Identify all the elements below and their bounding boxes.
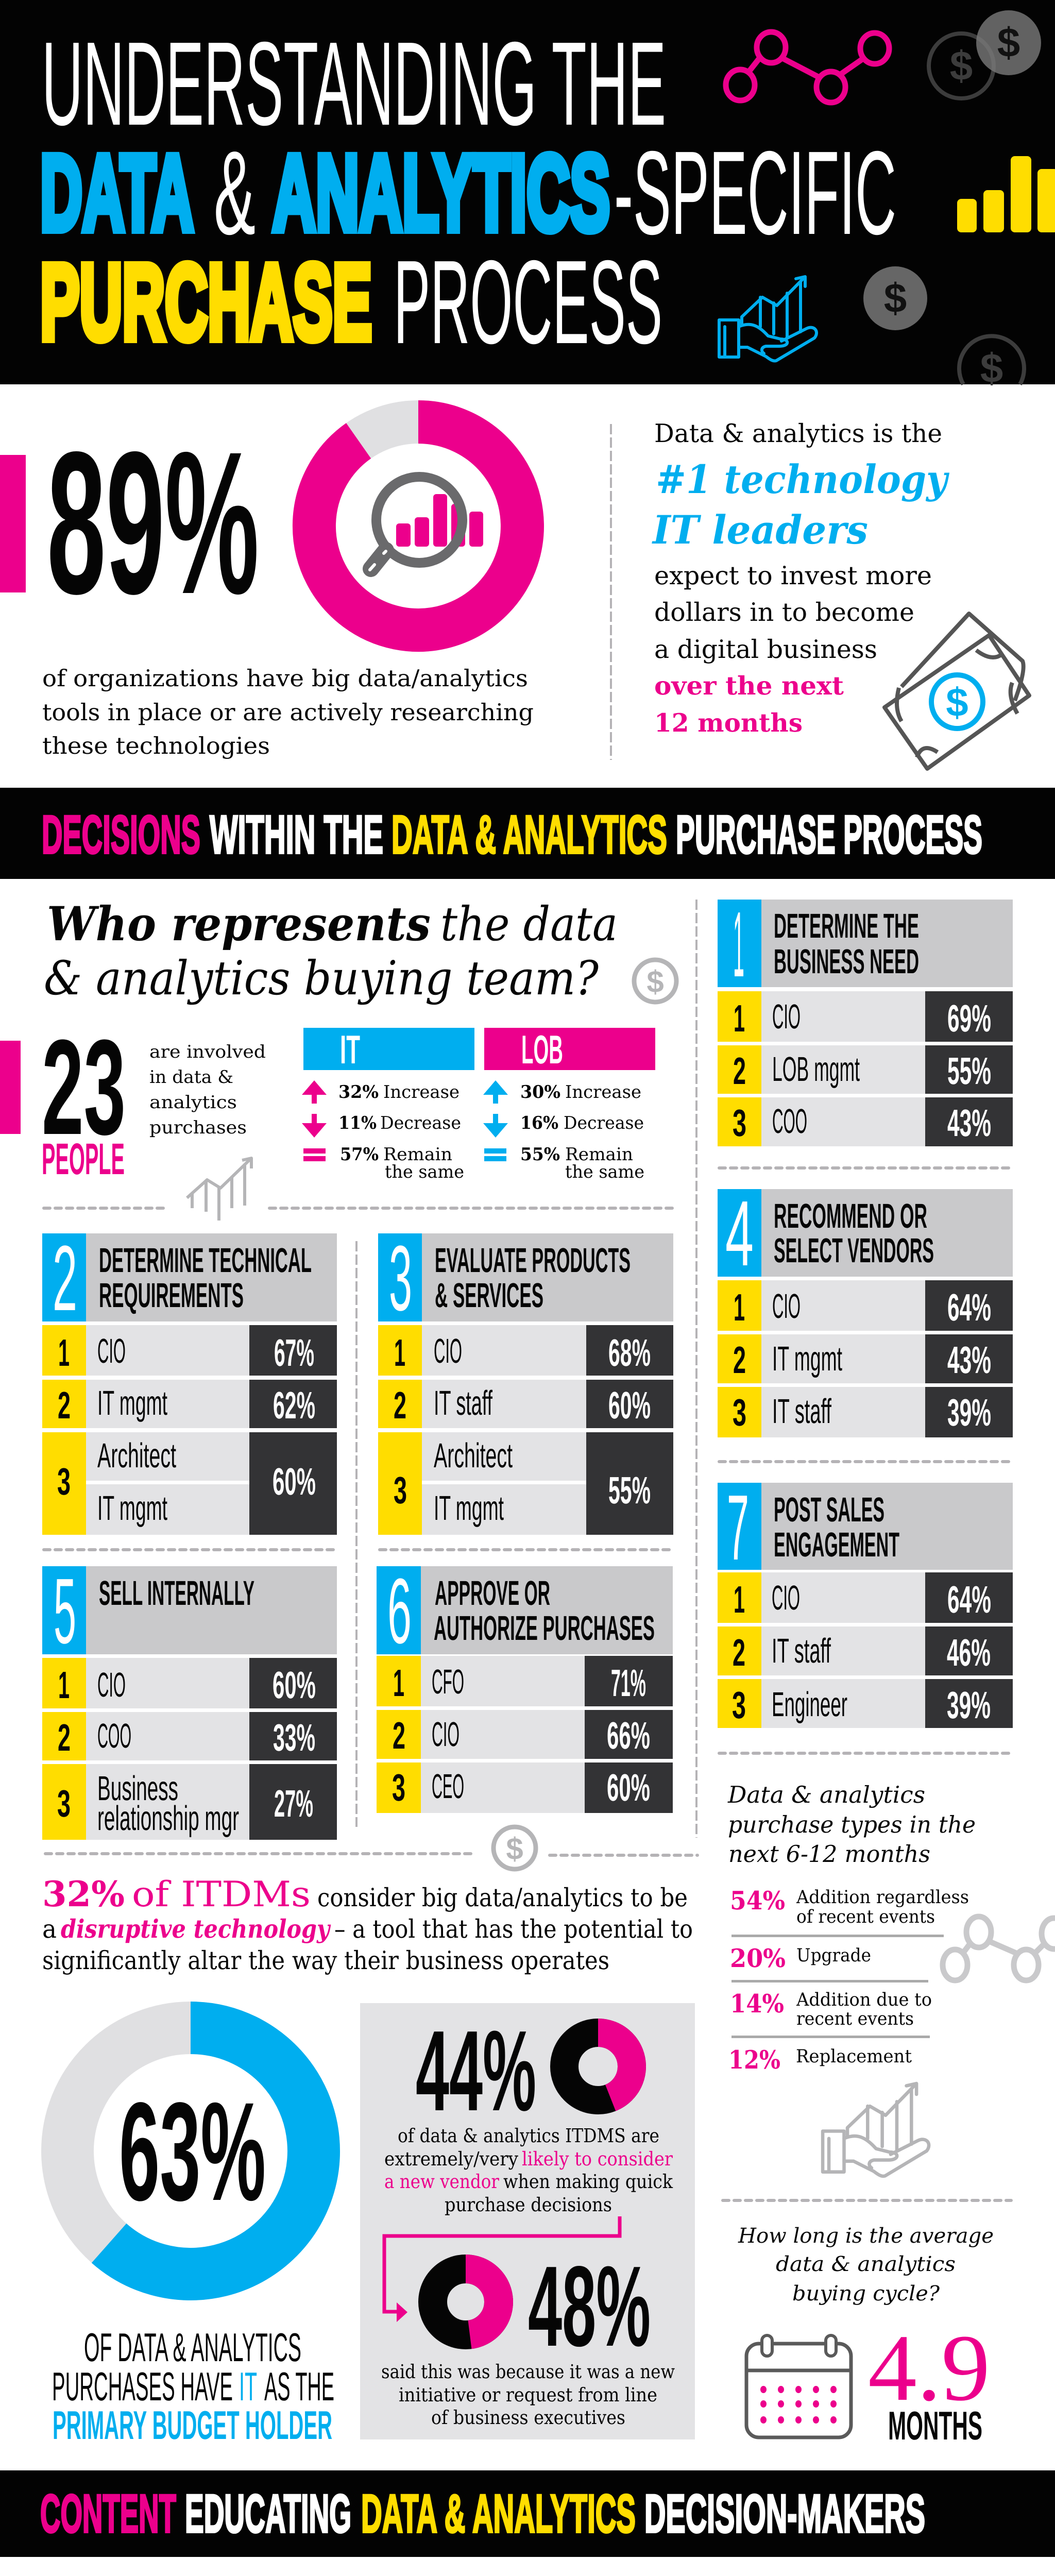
LOB column: 16% <box>520 1113 558 1133</box>
row: CIO 64%: 64% <box>947 1578 991 1621</box>
IT column: 57% <box>340 1144 379 1165</box>
text: organizations: these technologies <box>42 732 270 759</box>
stat: 12% <box>728 2045 912 2075</box>
big number 48%: 48% <box>528 2243 651 2370</box>
icon: gray hand holding chart <box>823 2083 929 2176</box>
text: AS THE <box>264 2364 334 2409</box>
text: number 1 technology: 12 months <box>654 708 803 738</box>
text: 32 percent of ITDMs: consider big data/analytics to be <box>317 1883 688 1912</box>
row: Architect / IT mgmt 55%: IT mgmt <box>434 1489 504 1528</box>
card 1: determine the business need: BUSINESS NEED <box>774 942 919 981</box>
card 7: post sales engagement: POST SALES <box>774 1490 884 1529</box>
LOB column: the same <box>565 1162 644 1182</box>
IT column: the same <box>385 1162 464 1182</box>
text: new initiative: initiative or request from line <box>399 2384 657 2406</box>
row: Engineer 39%: Engineer <box>772 1685 847 1724</box>
text: number 1 technology: IT leaders <box>652 507 868 553</box>
big number 63%: 63% <box>119 2073 266 2230</box>
row: CIO 69%: 1 <box>734 997 745 1040</box>
card 5: sell internally: 5 <box>54 1560 76 1663</box>
row: CIO 60%: CIO <box>97 1666 126 1704</box>
icon: magnifier with bars <box>370 477 483 570</box>
big number 89%: 89% <box>47 410 259 636</box>
text: likely to consider a new vendor: likely to consider <box>522 2148 673 2170</box>
card 2: determine technical requirements: 2 <box>53 1227 77 1330</box>
row: CIO 67%: 67% <box>274 1331 314 1374</box>
row: LOB mgmt 55%: LOB mgmt <box>772 1050 860 1089</box>
IT column: IT <box>340 1027 360 1072</box>
big number 44%: 44% <box>416 2007 536 2135</box>
row: Business relationship mgr 27%: 3 <box>57 1782 71 1825</box>
text: are involved: purchases <box>149 1117 247 1138</box>
stat: 12%: 12% <box>728 2045 780 2075</box>
row: IT mgmt 43%: 43% <box>947 1338 991 1381</box>
icon: gray coin <box>634 960 676 1002</box>
card 6: approve or authorize purchases: 6 <box>387 1560 412 1663</box>
text: organizations: of organizations have big data/analytics <box>42 665 528 692</box>
card 6: approve or authorize purchases: APPROVE OR <box>435 1574 550 1613</box>
card 2: determine technical requirements <box>42 1227 337 1535</box>
LOB column: Increase <box>565 1082 641 1103</box>
section heading: EDUCATING <box>185 2484 351 2544</box>
section heading: CONTENT <box>40 2484 176 2544</box>
title <box>40 17 896 368</box>
row: CIO 66%: CIO <box>432 1715 460 1754</box>
row: COO 43% <box>718 1097 1013 1146</box>
icon: dollar coin outline <box>929 33 994 98</box>
card 2: determine technical requirements: DETERMINE TECHNICAL <box>99 1241 312 1280</box>
row: CIO 69%: 69% <box>947 997 991 1040</box>
text: are involved: are involved <box>149 1042 266 1062</box>
card 5: sell internally: SELL INTERNALLY <box>99 1574 254 1613</box>
row: IT mgmt 43%: IT mgmt <box>772 1340 842 1378</box>
row: CIO 66%: 66% <box>607 1714 650 1757</box>
icon: calendar <box>746 2335 851 2437</box>
text: are involved <box>149 1042 266 1138</box>
card 3: evaluate products and services: EVALUATE PRODUCTS <box>435 1241 631 1280</box>
icon: dollar coin filled lower: $ <box>884 275 907 321</box>
row: IT staff 60%: 2 <box>394 1384 406 1427</box>
LOB column: 30% <box>520 1082 560 1103</box>
row: Engineer 39%: 39% <box>947 1684 991 1726</box>
card 7: post sales engagement: ENGAGEMENT <box>774 1526 899 1564</box>
panel: header <box>0 0 1055 391</box>
row: CFO 71%: CFO <box>432 1663 464 1701</box>
question: buying cycle? <box>792 2282 940 2306</box>
icon: dollar coin outline lower: $ <box>980 345 1003 391</box>
IT column: 32% <box>338 1082 379 1103</box>
stat: 12%: Replacement <box>796 2046 912 2067</box>
section heading: DATA & ANALYTICS <box>392 805 667 865</box>
IT column <box>302 1027 474 1182</box>
row: CIO 67%: 1 <box>58 1331 70 1374</box>
text: 32 percent of ITDMs: – a tool that has the potential to <box>334 1914 693 1944</box>
text: new initiative: of business executives <box>431 2406 625 2429</box>
stat: 23 people <box>42 1011 126 1184</box>
row: COO 43%: 3 <box>733 1101 746 1144</box>
icon: network line <box>726 32 889 103</box>
row: LOB mgmt 55%: 2 <box>733 1049 746 1092</box>
row: CFO 71%: 71% <box>611 1662 646 1704</box>
text: number 1 technology: over the next <box>654 671 844 701</box>
card 4: recommend or select vendors <box>718 1182 1013 1437</box>
IT column: 11% <box>338 1113 377 1133</box>
text: 32 percent of ITDMs: disruptive technology <box>61 1914 331 1944</box>
stat: 14%: Addition due to <box>796 1990 932 2010</box>
text: number 1 technology <box>652 419 949 738</box>
text: PEOPLE <box>42 1134 125 1184</box>
row: COO 43%: 43% <box>947 1101 991 1144</box>
panel: section banner content <box>0 2470 1055 2557</box>
heading: Data & analytics <box>727 1781 925 1808</box>
row: IT staff 46%: 2 <box>733 1631 745 1674</box>
icon: gray coin: $ <box>506 1832 523 1866</box>
row: Architect / IT mgmt 55%: 3 <box>394 1469 407 1512</box>
text: organizations: tools in place or are actively researching <box>42 699 534 726</box>
row: IT staff 39%: 39% <box>947 1391 991 1434</box>
row: Business relationship mgr 27%: relationship mgr <box>97 1799 239 1838</box>
card 3: evaluate products and services: 3 <box>389 1227 412 1330</box>
LOB column: Remain <box>565 1144 633 1165</box>
text: primary budget holder: PURCHASES HAVE <box>52 2364 233 2409</box>
row: CIO 64% <box>718 1572 1013 1623</box>
text: number 1 technology: a digital business <box>654 635 877 664</box>
icon: gray network <box>943 1917 1055 1980</box>
row: IT mgmt 62% <box>42 1380 337 1428</box>
row: CIO 60%: 1 <box>58 1664 70 1706</box>
row: Architect / IT mgmt 60% <box>42 1432 337 1535</box>
row: IT staff 60%: IT staff <box>434 1384 492 1422</box>
icon: money bills <box>884 614 1029 769</box>
stat: 20%: 20% <box>730 1943 786 1973</box>
text: likely to consider a new vendor: extremely/very <box>384 2148 518 2170</box>
card 7: post sales engagement: 7 <box>727 1476 749 1580</box>
row: Architect / IT mgmt 55%: 55% <box>608 1469 651 1512</box>
card 3: evaluate products and services: & SERVICES <box>435 1276 543 1315</box>
row: CIO 64% <box>718 1280 1013 1331</box>
heading: who represents: & analytics buying team? <box>44 952 599 1006</box>
row: CIO 64%: CIO <box>772 1287 801 1326</box>
icon: dollar coin outline: $ <box>950 43 973 89</box>
row: CIO 68%: CIO <box>434 1332 462 1370</box>
panel: 89 percent stat <box>0 410 1029 769</box>
row: CEO 60%: CEO <box>432 1767 464 1806</box>
icon: money bills: $ <box>946 680 968 725</box>
arrow: connector <box>384 2216 620 2322</box>
LOB column: Decrease <box>564 1113 644 1133</box>
row: IT staff 46%: 46% <box>947 1631 991 1674</box>
text: 32 percent of ITDMs: of ITDMs <box>132 1874 311 1915</box>
text: new initiative <box>381 2361 675 2429</box>
donut chart 63% <box>67 2028 314 2274</box>
section heading <box>42 805 982 865</box>
icon: gray chart <box>187 1158 251 1221</box>
section heading: DATA & ANALYTICS <box>361 2484 636 2544</box>
text: are involved: analytics <box>149 1092 237 1113</box>
row: Architect / IT mgmt 60%: Architect <box>97 1436 176 1475</box>
stat: 54%: of recent events <box>796 1907 935 1927</box>
icon: dollar coin outline lower <box>959 336 1024 391</box>
row: CIO 68%: 1 <box>394 1331 405 1374</box>
stat: 4.9 months: 4.9 <box>868 2315 990 2421</box>
row: IT staff 39%: IT staff <box>772 1392 831 1431</box>
row: IT mgmt 43%: 2 <box>733 1338 746 1381</box>
row: Engineer 39%: 3 <box>732 1684 746 1726</box>
question: data & analytics <box>776 2252 956 2276</box>
LOB column: 55% <box>520 1144 560 1165</box>
icon: dollar coin filled lower <box>863 266 927 330</box>
row: CIO 64%: CIO <box>772 1579 800 1617</box>
row: IT staff 39%: 3 <box>733 1391 746 1434</box>
text: 32 percent of ITDMs: 32% <box>42 1874 125 1915</box>
row: COO 43%: COO <box>772 1102 807 1141</box>
row: Business relationship mgr 27%: 27% <box>274 1782 313 1825</box>
stat: 23 people: 23 <box>42 1011 126 1163</box>
row: IT staff 39% <box>718 1387 1013 1437</box>
row: CIO 64%: 1 <box>734 1286 745 1329</box>
donut chart 44% <box>565 2033 632 2100</box>
title: DATA <box>40 133 194 253</box>
text: likely to consider a new vendor: a new vendor <box>384 2171 499 2193</box>
row: IT staff 46%: IT staff <box>772 1632 831 1670</box>
heading: purchase types in the <box>728 1811 976 1838</box>
text: number 1 technology: expect to invest more <box>654 561 932 590</box>
row: IT mgmt 62%: 62% <box>273 1384 315 1427</box>
text: 32 percent of ITDMs: a <box>42 1914 57 1944</box>
row: LOB mgmt 55% <box>718 1045 1013 1094</box>
heading: who represents: Who represents <box>47 897 431 952</box>
IT column: Remain <box>383 1144 452 1165</box>
card 1: determine the business need: DETERMINE THE <box>774 907 919 945</box>
question: How long is the average <box>738 2224 994 2248</box>
row: COO 33%: 33% <box>273 1716 315 1759</box>
card 1: determine the business need <box>718 893 1013 1146</box>
row: Business relationship mgr 27% <box>42 1764 337 1840</box>
accent bar <box>0 455 26 592</box>
text: likely to consider a new vendor <box>384 2125 673 2216</box>
text: likely to consider a new vendor: of data & analytics ITDMS are <box>398 2125 659 2147</box>
card 6: approve or authorize purchases: AUTHORIZE PURCHASES <box>434 1609 655 1648</box>
text: number 1 technology: dollars in to become <box>654 598 914 627</box>
row: CEO 60%: 3 <box>392 1766 405 1809</box>
question <box>738 2224 994 2306</box>
text: number 1 technology: Data & analytics is the <box>654 419 942 448</box>
icon: dollar coin filled <box>976 10 1041 75</box>
row: CIO 68% <box>378 1325 673 1376</box>
row: Architect / IT mgmt 60%: 3 <box>57 1460 71 1503</box>
row: Architect / IT mgmt 55% <box>378 1432 673 1535</box>
card 2: determine technical requirements: REQUIREMENTS <box>99 1276 244 1315</box>
row: CIO 64%: 64% <box>947 1286 991 1329</box>
row: CFO 71% <box>377 1656 673 1706</box>
row: Business relationship mgr 27%: Business <box>97 1769 178 1808</box>
stat: 14%: 14% <box>730 1989 784 2019</box>
stat: 54%: 54% <box>730 1886 785 1916</box>
row: COO 33%: 2 <box>58 1716 71 1759</box>
row: CIO 64%: 1 <box>734 1578 745 1621</box>
card 1: determine the business need: 1 <box>733 893 744 996</box>
row: IT mgmt 62%: IT mgmt <box>97 1384 167 1422</box>
donut chart 89% <box>314 422 522 630</box>
heading <box>727 1781 976 1868</box>
row: CIO 60% <box>42 1658 337 1708</box>
card 5: sell internally <box>42 1560 337 1840</box>
title: ANALYTICS <box>273 133 610 253</box>
text: 32 percent of ITDMs <box>42 1874 693 1975</box>
row: CIO 60%: 60% <box>273 1664 316 1706</box>
row: IT staff 60%: 60% <box>608 1384 651 1427</box>
IT column: Decrease <box>380 1113 461 1133</box>
stat: 14%: recent events <box>796 2009 914 2029</box>
row: CIO 66%: 2 <box>393 1714 405 1757</box>
row: LOB mgmt 55%: 55% <box>947 1049 991 1092</box>
row: CIO 69% <box>718 991 1013 1042</box>
title: & <box>214 126 256 259</box>
row: IT mgmt 43% <box>718 1334 1013 1383</box>
text: primary budget holder <box>52 2325 334 2448</box>
row: IT staff 46% <box>718 1626 1013 1675</box>
text: primary budget holder: PRIMARY BUDGET HOLDER <box>53 2402 332 2448</box>
panel: new vendor stats <box>360 2003 695 2439</box>
text: likely to consider a new vendor: when making quick <box>503 2171 673 2193</box>
row: CEO 60%: 60% <box>607 1766 650 1809</box>
row: Engineer 39% <box>718 1679 1013 1728</box>
heading: who represents <box>44 897 618 1006</box>
card 6: approve or authorize purchases <box>377 1560 673 1813</box>
row: IT mgmt 62%: 2 <box>58 1384 71 1427</box>
section heading: DECISIONS <box>42 805 200 865</box>
section heading <box>40 2484 925 2544</box>
stat: 54% <box>730 1886 969 1927</box>
row: Architect / IT mgmt 55%: Architect <box>434 1436 513 1475</box>
row: IT staff 60% <box>378 1380 673 1428</box>
LOB column: LOB <box>521 1027 563 1072</box>
row: CFO 71%: 1 <box>393 1662 404 1704</box>
text: new initiative: said this was because it was a new <box>381 2361 675 2383</box>
row: CIO 67% <box>42 1325 337 1376</box>
row: COO 33%: COO <box>97 1717 131 1755</box>
panel: section banner decisions <box>0 788 1055 879</box>
title: PROCESS <box>394 235 662 368</box>
card 7: post sales engagement <box>718 1476 1013 1728</box>
card 4: recommend or select vendors: 4 <box>725 1182 754 1285</box>
row: Architect / IT mgmt 60%: IT mgmt <box>97 1489 167 1528</box>
icon: gray coin <box>494 1827 536 1869</box>
icon: gray coin: $ <box>646 964 664 999</box>
row: CEO 60% <box>377 1762 673 1813</box>
text: primary budget holder: IT <box>239 2364 257 2409</box>
stat: 14% <box>730 1989 932 2029</box>
row: COO 33% <box>42 1712 337 1760</box>
row: CIO 69%: CIO <box>772 997 801 1036</box>
title: PURCHASE <box>40 243 372 362</box>
text: 32 percent of ITDMs: significantly altar the way their business operates <box>42 1946 609 1975</box>
icon: yellow bars <box>957 156 1055 232</box>
row: Architect / IT mgmt 60%: 60% <box>273 1460 316 1503</box>
panel: purchase types <box>727 1781 1055 2176</box>
row: CIO 66% <box>377 1710 673 1759</box>
text: organizations <box>42 665 534 759</box>
stat: 20% <box>730 1943 871 1973</box>
text: primary budget holder: OF DATA & ANALYTICS <box>84 2325 301 2370</box>
card 3: evaluate products and services <box>378 1227 673 1535</box>
text: likely to consider a new vendor: purchase decisions <box>445 2194 612 2216</box>
heading: next 6-12 months <box>728 1840 930 1868</box>
section heading: WITHIN THE <box>210 805 383 865</box>
heading: who represents: the data <box>440 897 618 952</box>
row: CIO 68%: 68% <box>608 1331 651 1374</box>
IT column: Increase <box>383 1082 460 1103</box>
text: are involved: in data & <box>149 1067 233 1088</box>
text: number 1 technology: #1 technology <box>656 456 949 502</box>
icon: dollar coin filled: $ <box>997 20 1020 65</box>
icon: hand holding chart <box>719 277 816 361</box>
stat: 54%: Addition regardless <box>796 1887 969 1908</box>
donut chart 48% <box>433 2269 499 2335</box>
row: CIO 67%: CIO <box>97 1332 126 1370</box>
panel: buying cycle <box>738 2224 994 2448</box>
stat: 20%: Upgrade <box>796 1945 871 1966</box>
LOB column <box>483 1027 655 1182</box>
accent bar <box>0 1041 21 1134</box>
